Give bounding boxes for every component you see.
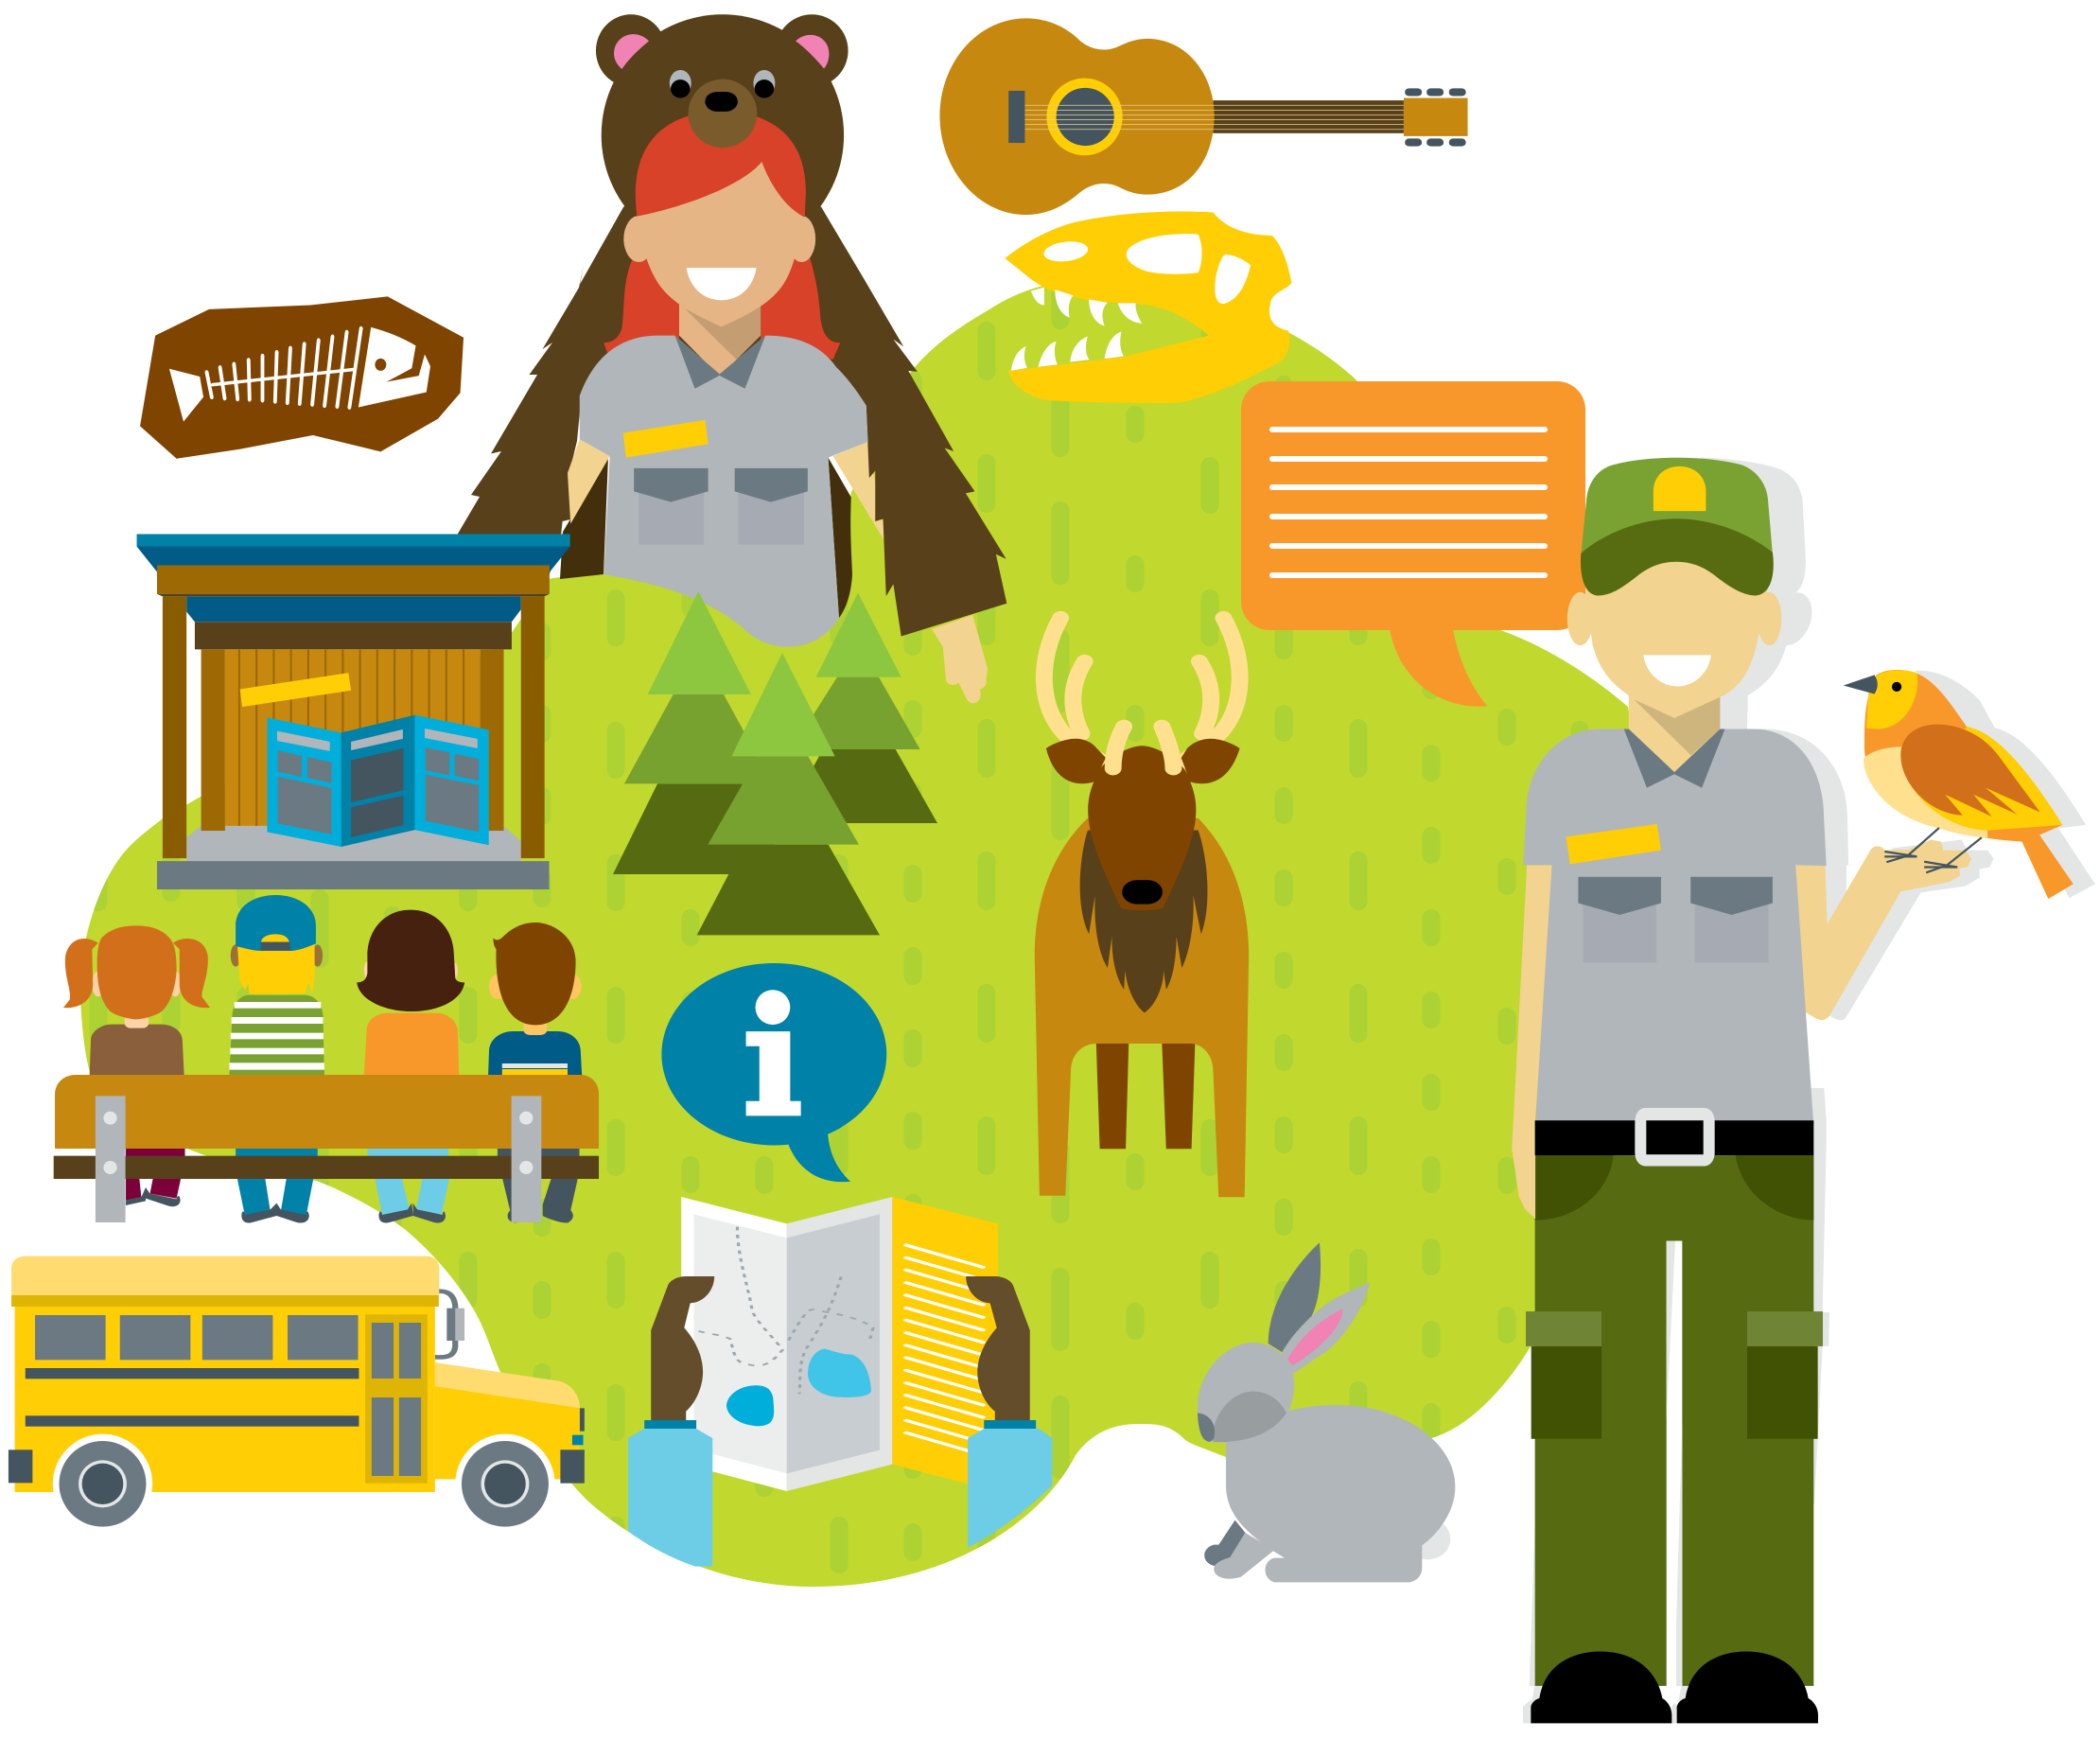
- green background blob: [80, 255, 1665, 1608]
- shelter wall: [201, 649, 503, 831]
- child with cap: [229, 895, 324, 1223]
- back right tree: [782, 593, 937, 823]
- ranger raised arm and hand: [1795, 840, 1971, 1020]
- elk body: [1035, 818, 1249, 1197]
- red hair back: [604, 254, 840, 360]
- cargo pockets: [1526, 1311, 1823, 1439]
- bus mirror: [435, 1291, 464, 1357]
- shirt pockets: [634, 468, 808, 545]
- collar: [675, 336, 765, 389]
- left arm: [568, 439, 610, 524]
- bear paw hand: [932, 615, 988, 703]
- trouser shadow: [1523, 1088, 1829, 1723]
- fringe: [636, 115, 806, 218]
- shelter posts: [163, 596, 545, 858]
- front wheel: [455, 1434, 585, 1534]
- ranger name badge: [1566, 824, 1661, 864]
- bear head: [580, 14, 866, 406]
- bus hood: [435, 1362, 585, 1479]
- face: [623, 159, 815, 326]
- hip pockets: [1535, 1155, 1813, 1221]
- speech bubble: [1241, 381, 1585, 707]
- dark pelt lining: [829, 458, 852, 618]
- ranger belt and buckle: [1535, 1108, 1813, 1166]
- elk ears: [1046, 739, 1240, 783]
- boots: [1531, 1651, 1818, 1723]
- elk mane: [1080, 831, 1207, 1012]
- ranger face: [1567, 553, 1781, 718]
- bear snout: [689, 79, 757, 148]
- left tree: [613, 591, 788, 874]
- elk: [1035, 618, 1249, 1197]
- ranger upper drop shadow: [1669, 457, 1994, 1020]
- neck: [679, 302, 761, 377]
- elk antlers: [1044, 618, 1240, 767]
- trail map: [681, 1197, 998, 1492]
- right arm: [833, 442, 930, 627]
- ranger left arm: [1512, 865, 1552, 1219]
- ranger trousers: [1526, 1155, 1823, 1686]
- park ranger with bird: [1512, 457, 2095, 1723]
- shelter sign: [240, 673, 351, 707]
- child with pigtails: [63, 925, 210, 1206]
- hands holding trail map: [628, 1197, 1052, 1567]
- child with dark hair: [357, 910, 464, 1223]
- shelter floor: [157, 826, 550, 889]
- bus door: [365, 1314, 428, 1484]
- bear eyes: [670, 70, 775, 98]
- rabbit: [1198, 1242, 1455, 1582]
- map text lines: [906, 1245, 983, 1452]
- child with brown hair: [488, 922, 582, 1222]
- school bus: [9, 1256, 585, 1534]
- icon: information bubble: [661, 963, 886, 1182]
- bus stripes: [26, 1368, 359, 1427]
- left arm: [628, 1276, 714, 1567]
- visitor shelter with map board: [137, 534, 570, 889]
- ranger smile: [1643, 655, 1711, 686]
- ranger collar: [1624, 729, 1724, 788]
- front tree: [697, 653, 880, 935]
- bus body: [9, 1256, 439, 1492]
- elk head: [1088, 746, 1196, 910]
- children on bench: [54, 895, 599, 1223]
- folding map board: [267, 715, 489, 847]
- right arm: [966, 1276, 1052, 1548]
- bench: [54, 1075, 599, 1222]
- map lakes: [726, 1349, 871, 1426]
- shirt: [580, 336, 868, 647]
- rear wheel: [53, 1434, 152, 1534]
- ranger wearing bear pelt: [458, 14, 1006, 703]
- bear ears inner: [614, 34, 829, 69]
- left pelt and dark lining: [458, 206, 662, 587]
- right pelt: [809, 206, 1006, 636]
- elk back legs: [1096, 1043, 1195, 1149]
- ranger shirt: [1523, 729, 1827, 1123]
- icon: dinosaur skull: [1005, 212, 1291, 403]
- ranger cap: [1581, 458, 1774, 595]
- icon: fish fossil: [140, 296, 464, 459]
- name badge: [623, 420, 709, 458]
- ranger pockets: [1578, 877, 1773, 962]
- shelter roof: [137, 534, 570, 649]
- bus windows: [35, 1315, 359, 1360]
- smile: [687, 268, 757, 300]
- icon: guitar: [939, 18, 1468, 215]
- pine trees: [613, 591, 937, 935]
- map trails: [698, 1227, 873, 1394]
- elk nose: [1122, 880, 1163, 905]
- ranger neck: [1629, 692, 1720, 774]
- elk antler tines: [1113, 727, 1173, 768]
- orange bird: [1844, 670, 2095, 899]
